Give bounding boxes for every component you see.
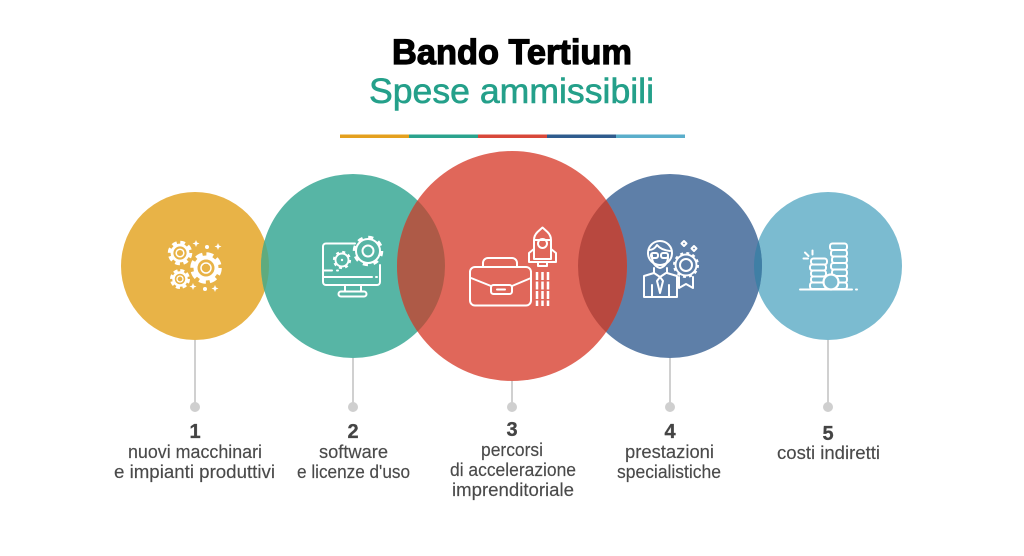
label 5: costi indiretti <box>777 443 880 463</box>
icon: gears <box>170 240 222 292</box>
label 1 <box>114 421 275 482</box>
title colour rule <box>340 134 685 138</box>
icon: briefcase and rocket <box>470 228 556 306</box>
label 2: software <box>319 442 388 462</box>
label 4 <box>617 421 721 482</box>
overlap blue light blue <box>754 241 762 291</box>
label 3: percorsi <box>481 440 543 460</box>
title <box>369 33 654 111</box>
label 5: 5 <box>822 423 834 445</box>
label 1: e impianti produttivi <box>114 462 275 482</box>
icon: coin stacks <box>800 244 857 290</box>
label 3 <box>450 419 576 500</box>
label 2: 2 <box>347 421 359 443</box>
label 2: e licenze d'uso <box>297 462 410 482</box>
label 1: 1 <box>189 421 201 443</box>
overlap red blue <box>578 200 627 332</box>
circle 5 light blue <box>754 192 902 340</box>
label 1: nuovi macchinari <box>128 442 262 462</box>
label 2 <box>297 421 410 482</box>
label 3: 3 <box>506 419 518 441</box>
overlap yellow teal <box>261 241 269 291</box>
label 4: 4 <box>664 421 676 443</box>
label 3: di accelerazione <box>450 460 576 480</box>
circle 3 red <box>397 151 627 381</box>
circle 1 yellow <box>121 192 269 340</box>
circle 2 teal <box>261 174 445 358</box>
title: Spese ammissibili <box>369 72 654 111</box>
label 3: imprenditoriale <box>452 480 574 500</box>
label 4: prestazioni <box>625 442 714 462</box>
overlap teal red <box>397 200 445 332</box>
circle 4 blue <box>578 174 762 358</box>
icon: monitor with gears <box>323 238 382 296</box>
circles with overlaps <box>121 151 902 381</box>
connector lines and dots <box>190 338 833 412</box>
icon: professional with award <box>644 241 698 297</box>
label 5 <box>777 423 880 463</box>
label 4: specialistiche <box>617 462 721 482</box>
title: Bando Tertium <box>392 33 632 72</box>
